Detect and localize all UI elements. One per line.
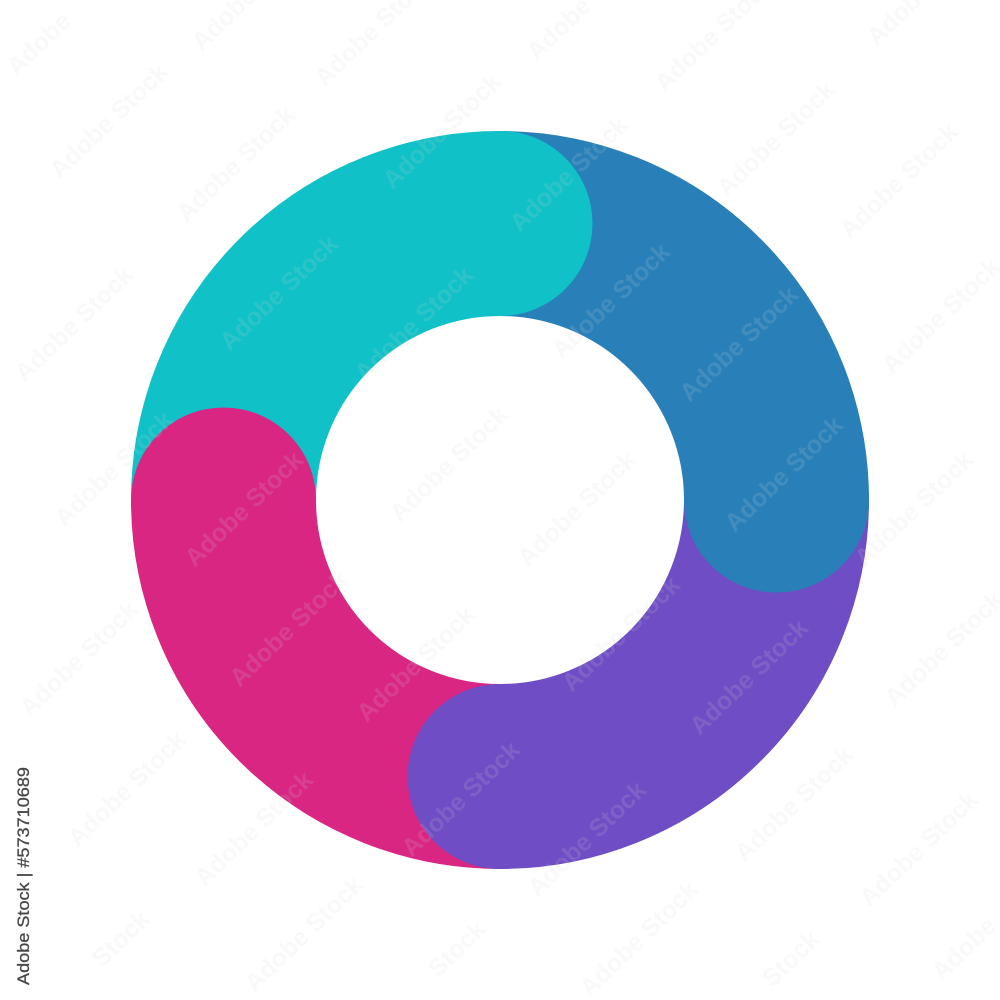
watermark pattern: Adobe Stock: [14, 596, 144, 722]
segment: magenta: [131, 408, 500, 776]
watermark pattern: Adobe Stock: [834, 118, 964, 244]
watermark pattern: Adobe Stock: [674, 281, 804, 407]
watermark pattern: Adobe: [926, 912, 1000, 986]
segment: teal: [224, 131, 592, 500]
watermark pattern: Adobe Stock: [179, 446, 309, 572]
watermark pattern: Adobe Stock: [239, 871, 369, 997]
teal cap restored above blue: [408, 131, 592, 316]
watermark pattern: Stock: [87, 905, 155, 973]
stock credit text: Adobe Stock | #573710689: [14, 767, 33, 985]
watermark pattern: Adobe Stock: [512, 446, 642, 572]
watermark pattern: Adobe Stock: [504, 111, 634, 237]
watermark pattern: Adobe Stock: [377, 68, 507, 194]
watermark pattern: Adobe Stock: [546, 238, 676, 364]
watermark pattern: Adobe Stock: [396, 736, 526, 862]
watermark pattern: Adobe Stock: [349, 261, 479, 387]
watermark pattern: Adobe Stock: [214, 230, 344, 356]
donut chart: [131, 131, 869, 869]
purple cap restored above magenta: [408, 684, 592, 869]
watermark pattern: Adobe Stock: [44, 58, 174, 184]
watermark pattern: Adobe Stock: [719, 411, 849, 537]
segment: purple: [408, 500, 776, 869]
watermark pattern: Adobe Stock: [9, 261, 139, 387]
watermark pattern: Stock: [423, 915, 491, 983]
watermark pattern: Adobe Stock: [684, 614, 814, 740]
watermark pattern: Stock: [757, 925, 825, 993]
watermark pattern: Adobe: [1, 7, 77, 81]
watermark pattern: Adobe Stock: [556, 571, 686, 697]
watermark pattern: Adobe Stock: [849, 446, 979, 572]
watermark pattern: Adobe Stock: [189, 766, 319, 892]
watermark pattern: Adobe Stock: [522, 776, 652, 902]
watermark pattern: Adobe Stock: [224, 566, 354, 692]
watermark pattern: Adobe Stock: [49, 406, 179, 532]
watermark pattern: Adobe Stock: [62, 726, 192, 852]
watermark pattern: Adobe Stock: [171, 101, 301, 227]
watermark pattern: Adobe Stock: [384, 401, 514, 527]
watermark pattern: Adobe Stock: [854, 786, 984, 912]
watermark pattern: Adobe Stock: [351, 601, 481, 727]
watermark pattern: Adobe Stock: [729, 741, 859, 867]
watermark pattern: Adobe Stock: [711, 76, 841, 202]
watermark pattern: Adobe Stock: [574, 876, 704, 1000]
blue cap restored above purple: [684, 408, 869, 592]
segment: blue: [500, 224, 869, 592]
